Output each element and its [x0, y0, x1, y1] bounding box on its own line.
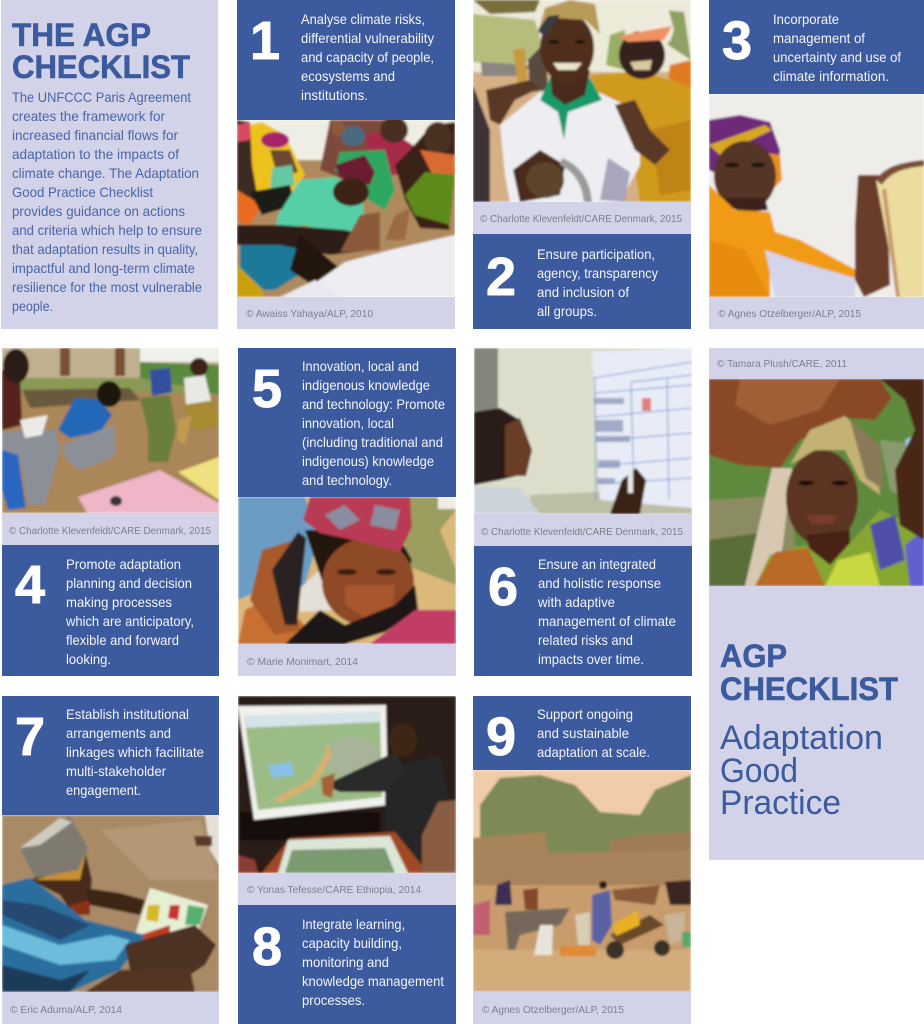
step 8 text: monitoring and [302, 954, 389, 970]
photo: man writing on chart [474, 348, 692, 514]
step 1 text: institutions. [301, 87, 368, 103]
panel: AGP Checklist cover [709, 348, 924, 860]
heading: The AGP Checklist [12, 17, 190, 85]
step 5 text: and technology. [302, 472, 392, 488]
step 7 text: Establish institutional [66, 706, 189, 722]
photo: livestock and cart at a village water point [473, 770, 691, 992]
step 8 text: capacity building, [302, 935, 402, 951]
intro text block: The UNFCCC Paris Agreement [12, 89, 191, 105]
photo: smiling woman holding a soil ball [473, 0, 691, 202]
number 7: 7 [15, 707, 45, 767]
step 3 text: uncertainty and use of [773, 49, 901, 65]
step 9 text: adaptation at scale. [537, 744, 650, 760]
photo credit: © Tamara Plush/CARE, 2011 [717, 358, 847, 370]
photo: man reading a leaflet [2, 815, 219, 992]
step 5 text [302, 358, 445, 488]
step 6 text: impacts over time. [538, 651, 644, 667]
step 6 text: Ensure an integrated [538, 556, 656, 572]
photo credit: © Agnes Otzelberger/ALP, 2015 [718, 308, 861, 320]
intro text block: Good Practice Checklist [12, 184, 153, 200]
step 6 text: and holistic response [538, 575, 661, 591]
intro text block: adaptation to the impacts of [12, 146, 179, 162]
heading: The AGP Checklist: THE AGP [12, 17, 151, 53]
step 4 text: flexible and forward [66, 632, 179, 648]
step 7 text: multi-stakeholder [66, 763, 166, 779]
step 1 text [301, 11, 434, 103]
intro text block [12, 89, 202, 314]
step 5 text: innovation, local [302, 415, 394, 431]
number 8: 8 [252, 917, 282, 977]
step 7 text: engagement. [66, 782, 141, 798]
step 2 text: Ensure participation, [537, 246, 655, 262]
intro text block: and criteria which help to ensure [12, 222, 202, 238]
panel: step 1 [237, 0, 455, 329]
photo credit: © Marie Monimart, 2014 [247, 656, 358, 668]
panel: step 2 [473, 0, 691, 329]
step 8 text: Integrate learning, [302, 916, 405, 932]
photo: woman on mobile phone [238, 497, 456, 644]
photo: group reading on pink paper [2, 348, 219, 513]
number 1: 1 [250, 11, 280, 71]
step 7 text: linkages which facilitate [66, 744, 204, 760]
intro text block: increased financial flows for [12, 127, 178, 143]
step 1 text: ecosystems and [301, 68, 395, 84]
number 2: 2 [486, 247, 516, 307]
heading: AGP Checklist: AGP [720, 638, 787, 674]
intro text block: provides guidance on actions [12, 203, 185, 219]
step 6 text: management of climate [538, 613, 676, 629]
step 8 text: processes. [302, 992, 365, 1008]
heading: AGP Checklist: CHECKLIST [720, 671, 898, 707]
number 6: 6 [488, 557, 518, 617]
intro text block: creates the framework for [12, 108, 165, 124]
step 3 text: management of [773, 30, 865, 46]
photo credit: © Charlotte Klevenfeldt/CARE Denmark, 2015 [9, 525, 211, 537]
photo: women around a map on the ground [237, 117, 455, 297]
step 4 text: making processes [66, 594, 172, 610]
intro text block: climate change. The Adaptation [12, 165, 199, 181]
step 4 text: Promote adaptation [66, 556, 181, 572]
step 8 text [302, 916, 444, 1008]
number 4: 4 [15, 555, 45, 615]
step 5 text: indigenous) knowledge [302, 453, 434, 469]
photo credit: © Awaiss Yahaya/ALP, 2010 [246, 308, 373, 320]
step 6 text [537, 556, 676, 667]
panel: step 4 [2, 348, 219, 676]
subheading: Adaptation Good Practice: Adaptation [720, 719, 883, 757]
step 6 text: with adaptive [537, 594, 615, 610]
step 9 text [537, 706, 650, 760]
photo: woman in orange scarf with measuring container [709, 94, 924, 297]
step 5 text: indigenous knowledge [302, 377, 430, 393]
panel: step 8 [238, 696, 456, 1024]
panel: step 3 [709, 0, 924, 329]
panel: step 7 [2, 696, 219, 1024]
step 1 text: and capacity of people, [301, 49, 434, 65]
step 4 text: planning and decision [66, 575, 192, 591]
step 9 text: Support ongoing [537, 706, 633, 722]
intro text block: people. [12, 298, 53, 314]
photo credit: © Charlotte Klevenfeldt/CARE Denmark, 2015 [481, 526, 683, 538]
step 8 text: knowledge management [302, 973, 444, 989]
subheading: Adaptation Good Practice [720, 719, 883, 822]
photo credit: © Eric Aduma/ALP, 2014 [10, 1004, 122, 1016]
heading: The AGP Checklist: CHECKLIST [12, 49, 190, 85]
intro text block: impactful and long-term climate [12, 260, 195, 276]
photo: man presenting a vision map [238, 696, 456, 873]
step 3 text: climate information. [773, 68, 889, 84]
photo credit: © Charlotte Klevenfeldt/CARE Denmark, 2015 [480, 213, 682, 225]
step 2 text [537, 246, 658, 319]
subheading: Adaptation Good Practice: Practice [720, 784, 841, 822]
panel: step 9 [473, 696, 691, 1024]
step 9 text: and sustainable [537, 725, 629, 741]
step 7 text [66, 706, 204, 798]
step 5 text: and technology: Promote [302, 396, 445, 412]
number 5: 5 [252, 359, 282, 419]
step 4 text: which are anticipatory, [65, 613, 194, 629]
panel: intro [1, 0, 218, 329]
photo credit: © Agnes Otzelberger/ALP, 2015 [482, 1004, 624, 1016]
number 3: 3 [722, 11, 752, 71]
step 3 text [773, 11, 901, 84]
number 9: 9 [486, 707, 516, 767]
intro text block: resilience for the most vulnerable [12, 279, 202, 295]
panel: step 6 [474, 348, 692, 676]
panel: step 5 [238, 348, 456, 676]
step 4 text: looking. [66, 651, 111, 667]
step 6 text: related risks and [538, 632, 633, 648]
step 4 text [65, 556, 194, 667]
step 2 text: agency, transparency [537, 265, 658, 281]
step 2 text: and inclusion of [537, 284, 629, 300]
step 5 text: Innovation, local and [302, 358, 419, 374]
step 1 text: differential vulnerability [301, 30, 434, 46]
subheading: Adaptation Good Practice: Good [720, 752, 798, 790]
photo credit: © Yonas Tefesse/CARE Ethiopia, 2014 [247, 884, 421, 896]
photo: woman carrying gourd on her head [709, 379, 924, 586]
step 5 text: (including traditional and [302, 434, 443, 450]
step 2 text: all groups. [537, 303, 597, 319]
step 3 text: Incorporate [773, 11, 839, 27]
step 7 text: arrangements and [66, 725, 171, 741]
step 1 text: Analyse climate risks, [301, 11, 425, 27]
heading: AGP Checklist [720, 638, 898, 707]
intro text block: that adaptation results in quality, [12, 241, 198, 257]
